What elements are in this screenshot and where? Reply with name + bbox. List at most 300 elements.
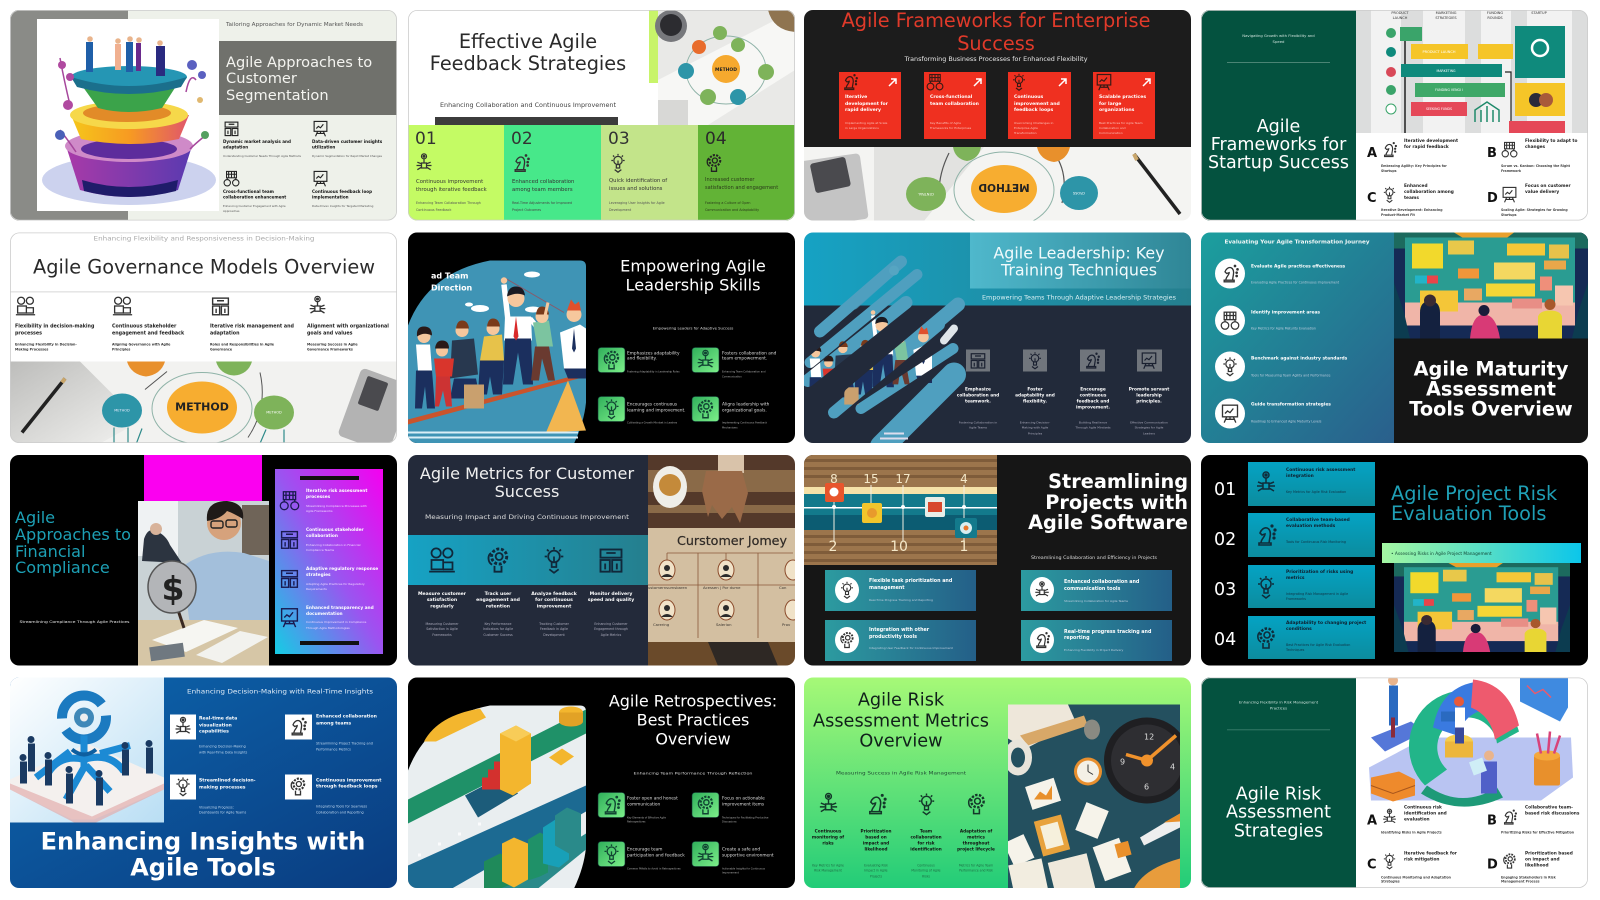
column 3: Tracking Customer [538, 622, 570, 626]
row 04: Best Practices for Agile Risk Evaluation [1286, 643, 1350, 647]
number labels: 02 [1214, 530, 1236, 550]
slide background [1201, 455, 1588, 666]
customer journey photo: Carering [653, 622, 670, 627]
method photo [10, 362, 413, 454]
title: Agile Risk [1236, 784, 1322, 804]
list item 2: Enhancing Collaboration in Financial [306, 543, 361, 547]
title: Agile [15, 508, 55, 527]
column 4: Leaders [1143, 432, 1155, 436]
item A [1367, 804, 1447, 834]
item 4: Governance Frameworks [307, 348, 353, 352]
item A: Continuous risk [1404, 804, 1442, 810]
roadmap illustration: SEEKING FUNDS [1426, 107, 1452, 111]
customer journey photo [648, 455, 801, 666]
item C: Continuous Monitoring and Adaptation [1381, 876, 1452, 880]
red card 4: Communication [1099, 131, 1123, 135]
subtitle: Streamlining Collaboration and Efficiency in Projects [1031, 555, 1157, 560]
title: Compliance [15, 558, 110, 577]
item 4: Continuous feedback loop [312, 189, 372, 194]
panel 2: Streamlining Collaboration for Agile Teams [1064, 599, 1128, 603]
feature 1: Enhancing Decision-Making [199, 744, 246, 748]
method photo: METHOD [114, 408, 130, 412]
timeline illustration: 10 [890, 539, 908, 555]
list item 4 [282, 605, 374, 630]
card border [1201, 678, 1588, 888]
item A: A [1367, 146, 1377, 161]
column 1: Risk Management [814, 868, 843, 872]
item 1: Making Processes [15, 348, 48, 352]
feature 4 [285, 774, 382, 814]
row 02 [1248, 513, 1375, 557]
kanban illustration [1394, 232, 1588, 338]
item A: evaluation [1404, 816, 1430, 822]
roadmap illustration: LAUNCH [1393, 16, 1408, 20]
row 04 [1248, 616, 1375, 659]
item 3 [598, 396, 686, 424]
column 4: project lifecycle [957, 846, 995, 852]
method photo: METHOD [266, 410, 282, 414]
row 02: evaluation methods [1286, 523, 1336, 529]
step 1: Evaluate Agile practices effectiveness [1251, 264, 1346, 270]
item B: based risk discussions [1525, 810, 1580, 816]
feature 1: capabilities [199, 728, 229, 734]
item A [1367, 138, 1458, 173]
red card 3: Enterprise Agile [1014, 126, 1038, 130]
item D: Startups [1501, 213, 1517, 217]
column 1: Continuous [815, 828, 842, 834]
analyst photo [138, 501, 269, 666]
feature 2: Enhanced collaboration [316, 714, 377, 720]
item D: D [1487, 191, 1498, 206]
item 2: Aligning Governance with Agile [112, 342, 171, 346]
title: Agile Tools [130, 854, 276, 882]
funnel illustration [37, 19, 219, 211]
row 01: Continuous risk assessment [1286, 467, 1355, 473]
item 4: Mechanisms [722, 426, 738, 430]
red card 1: rapid delivery [845, 107, 881, 113]
column 02: Project Outcomes [512, 208, 541, 212]
slide 7: Agile Leadership: Key Training Techniques [804, 232, 1191, 444]
item A: for rapid feedback [1404, 144, 1449, 150]
card border [408, 10, 795, 220]
slide background [804, 455, 1191, 666]
slide 15: Agile Risk Assessment Metrics Overview [804, 678, 1191, 900]
red card 3: feedback loops [1014, 107, 1053, 113]
team illustration [408, 260, 586, 444]
title: Training Techniques [1000, 260, 1157, 280]
column 03: 03 [608, 129, 630, 149]
column 4: Promote servant [1129, 386, 1169, 392]
list item 3: Requirements [306, 587, 327, 591]
item C: Strategies [1381, 880, 1400, 884]
item 1: Retrospectives [627, 820, 646, 824]
slide background [408, 10, 795, 221]
feature 3: Streamlined decision- [199, 778, 256, 784]
item 2: improvement items [722, 802, 765, 808]
item C: risk mitigation [1404, 856, 1440, 862]
item 3: Encourage team [627, 846, 662, 852]
column 03: Leveraging User Insights for Agile [609, 201, 665, 205]
column 1: Frameworks [432, 633, 452, 637]
roadmap illustration: MARKETING [1436, 69, 1456, 73]
list item 1 [280, 488, 367, 513]
subtitle: Enhancing Decision-Making with Real-Time Insights [187, 688, 373, 696]
item 4: organizational goals. [722, 408, 767, 414]
title: Assessment Metrics [813, 712, 989, 732]
step 4: Roadmap to Enhanced Agile Maturity Levels [1251, 420, 1322, 424]
column 4: Monitor delivery [590, 591, 632, 597]
column 3: for risk [918, 840, 935, 846]
column 02 [504, 125, 601, 221]
column 2: Evaluating Risk [864, 864, 888, 868]
roadmap illustration: MARKETING [1436, 11, 1457, 15]
timeline illustration: 4 [960, 472, 968, 486]
column 03: Development [609, 208, 632, 212]
column 2: Impact in Agile [864, 868, 888, 872]
column 2: Making with Agile [1022, 426, 1048, 430]
panel 1 [825, 570, 976, 611]
column 4: Effective Communication [1130, 420, 1168, 424]
subtitle: Streamlining Compliance Through Agile Practices [20, 619, 130, 624]
customer journey photo: Salerion [716, 622, 732, 627]
teal side panel [1201, 232, 1394, 444]
item 2: Techniques for Facilitating Productive [722, 816, 769, 820]
timeline illustration: 15 [863, 472, 879, 486]
column 2: adaptability and [1015, 392, 1055, 398]
title: Assessment [1426, 378, 1556, 400]
desk still-life illustration: 6 [1144, 782, 1149, 792]
method photo [655, 10, 795, 125]
column 1 [812, 793, 844, 872]
column 3: Continuous [917, 864, 935, 868]
item B [1487, 138, 1577, 173]
customer journey photo: Acessen | Por dume [703, 585, 741, 590]
list item 4: Continuous Improvement in Compliance [306, 620, 367, 624]
accent bar [649, 10, 658, 83]
kanban illustration [1394, 563, 1570, 652]
row 03 [1248, 565, 1375, 608]
item B: B [1487, 146, 1497, 161]
slide 1: Agile Approaches to Customer Segmentation [10, 10, 397, 221]
row 03: Frameworks [1286, 597, 1306, 601]
title: Agile Approaches to [226, 54, 372, 71]
step 2: Key Metrics for Agile Maturity Evaluation [1251, 326, 1316, 330]
item C: Enhanced [1404, 183, 1428, 189]
slide background [408, 678, 795, 888]
column 2: Track user [485, 591, 512, 597]
column 3: Through Agile Mindsets [1074, 426, 1111, 430]
customer journey photo: Con [779, 585, 787, 590]
column 3 [910, 793, 942, 878]
step 4: Guide transformation strategies [1251, 402, 1331, 408]
title: Strategies [1234, 822, 1323, 842]
column 2: flexibility. [1023, 398, 1047, 404]
column 4 [957, 795, 995, 872]
item 4: Create a safe and [722, 846, 760, 852]
subtitle: Empowering Leaders for Adaptive Success [653, 326, 733, 330]
item D: likelihood [1525, 862, 1549, 868]
row 01: Key Metrics for Agile Risk Evaluation [1286, 490, 1346, 494]
item 3: Common Pitfalls to Avoid in Retrospectives [627, 866, 681, 870]
card border [1201, 10, 1588, 220]
item 3: adaptation [210, 330, 240, 336]
divider [10, 290, 397, 293]
column 2: Indicators for Agile [483, 627, 513, 631]
title: Assessment [1226, 802, 1331, 822]
roadmap illustration [1356, 10, 1588, 133]
item B: changes [1525, 144, 1546, 150]
item D: Focus on customer [1525, 183, 1571, 189]
panel 4: Enhancing Flexibility in Project Delivery [1064, 648, 1124, 652]
slide 10: Agile Metrics for Customer Success [408, 455, 801, 666]
title: Financial [15, 542, 85, 561]
item D: Engaging Stakeholders in Risk [1501, 876, 1557, 880]
feature 4: Integrating Tools for Seamless [316, 804, 367, 808]
column 1 [418, 591, 467, 637]
row 04: Techniques [1285, 648, 1305, 652]
item D: D [1487, 858, 1498, 872]
title: Projects with [1045, 491, 1188, 514]
item 2 [312, 121, 383, 158]
panel 2: communication tools [1064, 586, 1121, 592]
title: Success [495, 482, 559, 501]
item A: A [1367, 814, 1377, 828]
red card 3: Overcoming Challenges in [1014, 121, 1053, 125]
subtitle: Transforming Business Processes for Enhanced Flexibility [903, 56, 1088, 63]
column 1: Emphasize [965, 386, 991, 392]
item C [1367, 850, 1458, 884]
row 03: metrics [1286, 575, 1305, 581]
item D: value delivery [1525, 189, 1559, 195]
row 03: Integrating Risk Management in Agile [1286, 592, 1348, 596]
list item 3 [282, 566, 378, 591]
item 3: learning and improvement. [627, 408, 686, 414]
column 4: Adaptation of [960, 828, 992, 834]
item 3: Roles and Responsibilities in Agile [210, 342, 275, 346]
team illustration: ad Team [431, 272, 468, 280]
item A: identification and [1404, 810, 1447, 816]
item 2: Continuous stakeholder [112, 324, 177, 330]
customer journey photo: ustomernsumsbaren [648, 585, 688, 590]
step 4 [1215, 398, 1331, 428]
team illustration: Direction [431, 284, 473, 292]
column 2 [861, 795, 891, 878]
step 1: Evaluating Agile Practices for Continuous Improvement [1251, 280, 1340, 284]
slide background [804, 678, 1191, 888]
isometric ring illustration [1369, 676, 1573, 807]
number labels: 01 [1214, 480, 1236, 500]
item B: Collaborative team- [1525, 804, 1573, 810]
slide 12: Agile Project Risk Evaluation Tools [1201, 455, 1588, 666]
step 3: Tools for Measuring Team Agility and Performance [1250, 374, 1331, 378]
item 4: supportive environment [722, 852, 774, 858]
title: Effective Agile [459, 30, 597, 53]
red card 2: Cross-functional [930, 94, 973, 100]
timeline illustration: 17 [895, 472, 911, 486]
title: Frameworks for [1211, 135, 1347, 155]
column 1: Key Metrics for Agile [812, 864, 844, 868]
item 2: Communication [722, 374, 742, 378]
teal icon band [408, 535, 648, 585]
column 3: improvement [537, 604, 572, 610]
gray side band [10, 10, 128, 221]
slide 13: Enhancing Insights with Agile Tools [10, 678, 397, 888]
item 2 [692, 348, 777, 378]
feature 1: Real-time data [199, 716, 237, 722]
title: Agile Frameworks for Enterprise [842, 9, 1150, 32]
panel 3: Integration with other [869, 627, 930, 633]
column 4: leadership [1136, 392, 1162, 398]
step 2 [1215, 306, 1320, 336]
item 4 [692, 842, 774, 874]
item 4: Data-Driven Insights for Targeted Marketing [312, 204, 374, 208]
feature 1: visualization [199, 722, 232, 728]
list item 1: Agile Frameworks [306, 509, 333, 513]
subtitle: Speed [1273, 39, 1285, 44]
step 1 [1215, 258, 1346, 288]
item C: C [1367, 858, 1377, 872]
red card 1: in Large Organizations [845, 126, 879, 130]
slide 3: Agile Frameworks for Enterprise Success [792, 9, 1191, 228]
title: Streamlining [1048, 470, 1188, 493]
item 4: Aligns leadership with [722, 402, 770, 408]
method photo: METHOD [978, 181, 1030, 193]
item C: C [1367, 191, 1377, 206]
item 3: Iterative risk management and [210, 324, 295, 330]
item 3 [598, 842, 685, 870]
column 4: throughout [963, 840, 989, 846]
item C: Iterative feedback for [1404, 850, 1458, 856]
item B: B [1487, 814, 1497, 828]
step 3 [1215, 352, 1348, 382]
number labels: 03 [1214, 580, 1236, 600]
title: Startup Success [1208, 153, 1349, 173]
column 1: Measure customer [418, 591, 467, 597]
column 3: for continuous [535, 597, 573, 603]
slide 14: Agile Retrospectives: Best Practices Overview [408, 678, 795, 888]
slide 9: Agile Approaches to Financial Compliance [10, 455, 397, 666]
item 4: Actionable Insights for Continuous [722, 866, 766, 870]
item 1: Foster open and honest [627, 796, 678, 802]
desk still-life illustration: 12 [1144, 732, 1154, 742]
red card 2: Frameworks for Enterprises [930, 126, 972, 130]
panel 3: productivity tools [869, 634, 917, 640]
item 2: Dynamic Segmentation for Rapid Market Changes [312, 154, 383, 158]
item 4 [312, 171, 374, 208]
subtitle: Enhancing Flexibility and Responsiveness in Decision-Making [94, 236, 315, 242]
column 04: Communication and Adaptability [705, 208, 759, 212]
item 4 [692, 396, 770, 430]
column 1: collaboration and [957, 392, 999, 398]
column 03: issues and solutions [609, 186, 663, 192]
column 01 [408, 125, 504, 221]
list item 2 [282, 527, 365, 552]
item D: Scaling Agile: Strategies for Growing [1501, 208, 1568, 212]
item 3: Cultivating a Growth Mindset in Leaders [627, 420, 678, 424]
column 3: Feedback in Agile [540, 627, 568, 631]
column 3: Development [543, 633, 565, 637]
column 3: improvement. [1076, 404, 1110, 410]
column 04 [698, 125, 795, 221]
green side panel [1201, 10, 1356, 221]
title: Agile Software [1028, 511, 1188, 534]
column 01: Enhancing Team Collaboration Through [416, 201, 481, 205]
column 3 [531, 591, 578, 637]
title: Agile Governance Models Overview [33, 256, 375, 278]
column 3: Monitoring of Agile [911, 868, 941, 872]
method photo: METHOD [715, 67, 737, 73]
item B: Scrum vs. Kanban: Choosing the Right [1501, 164, 1571, 168]
column 3: Risks [922, 874, 930, 878]
title: Agile Retrospectives: [609, 692, 777, 710]
item D [1487, 183, 1571, 217]
roadmap illustration: STRATEGIES [1435, 16, 1457, 20]
column 04: Increased customer [705, 177, 755, 183]
feature 2: Streamlining Project Tracking and [316, 742, 373, 746]
column 2: Principles [1028, 432, 1043, 436]
title: Segmentation [226, 87, 329, 104]
panel 4 [1021, 620, 1172, 661]
item 2: engagement and feedback [112, 330, 185, 336]
roadmap illustration: PRODUCT LAUNCH [1423, 50, 1456, 54]
column 2: impact and [863, 840, 889, 846]
subtitle: Navigating Growth with Flexibility and [1242, 33, 1315, 38]
slide 2: Effective Agile Feedback Strategies [408, 10, 795, 221]
heading: Evaluating Your Agile Transformation Journey [1224, 240, 1370, 246]
title panel [219, 41, 397, 115]
list item 2: Continuous stakeholder [306, 527, 365, 533]
title: Empowering Agile [620, 256, 766, 276]
subtitle: Tailoring Approaches for Dynamic Market Needs [225, 22, 363, 28]
column 2: based on [865, 834, 887, 840]
subtitle: Measuring Success in Agile Risk Management [836, 770, 966, 776]
item D: Management Process [1501, 880, 1540, 884]
red card 2 [924, 72, 986, 139]
column 02: Real-Time Adjustments for Improved [512, 201, 572, 205]
row 01 [1248, 462, 1375, 506]
item 1 [223, 122, 301, 158]
dark title panel [1394, 232, 1588, 444]
red card 4: Scalable practices [1099, 94, 1146, 100]
green side panel [1201, 678, 1356, 888]
slide background [408, 455, 648, 666]
column 4: metrics [967, 834, 985, 840]
panel 3: Integrating User Feedback for Continuous Improvement [869, 646, 954, 650]
item D: on impact and [1525, 856, 1560, 862]
column 1: teamwork. [965, 398, 991, 404]
item 1: Enhancing Flexibility in Decision- [15, 342, 77, 346]
method photo: METHOD [175, 400, 229, 414]
feature 1 [170, 714, 248, 754]
title: Feedback Strategies [430, 52, 626, 75]
slide background [804, 10, 1191, 147]
title: Agile Project Risk [1391, 482, 1558, 505]
item 1: Key Elements of Effective Agile [627, 816, 666, 820]
title: Best Practices [637, 710, 749, 730]
title: Success [957, 32, 1035, 55]
list item 1: Iterative risk assessment [306, 488, 367, 494]
list item 1: processes [306, 494, 331, 500]
striped team illustration [804, 232, 984, 444]
item C: collaboration among [1404, 189, 1454, 195]
timeline illustration: 8 [830, 472, 838, 486]
item 2 [692, 792, 769, 824]
row 03: Prioritization of risks using [1286, 569, 1353, 575]
list item 3: strategies [306, 572, 331, 578]
red card 4: organizations [1099, 107, 1135, 113]
feature 3: making processes [199, 784, 246, 790]
column 1: satisfaction [427, 597, 457, 603]
